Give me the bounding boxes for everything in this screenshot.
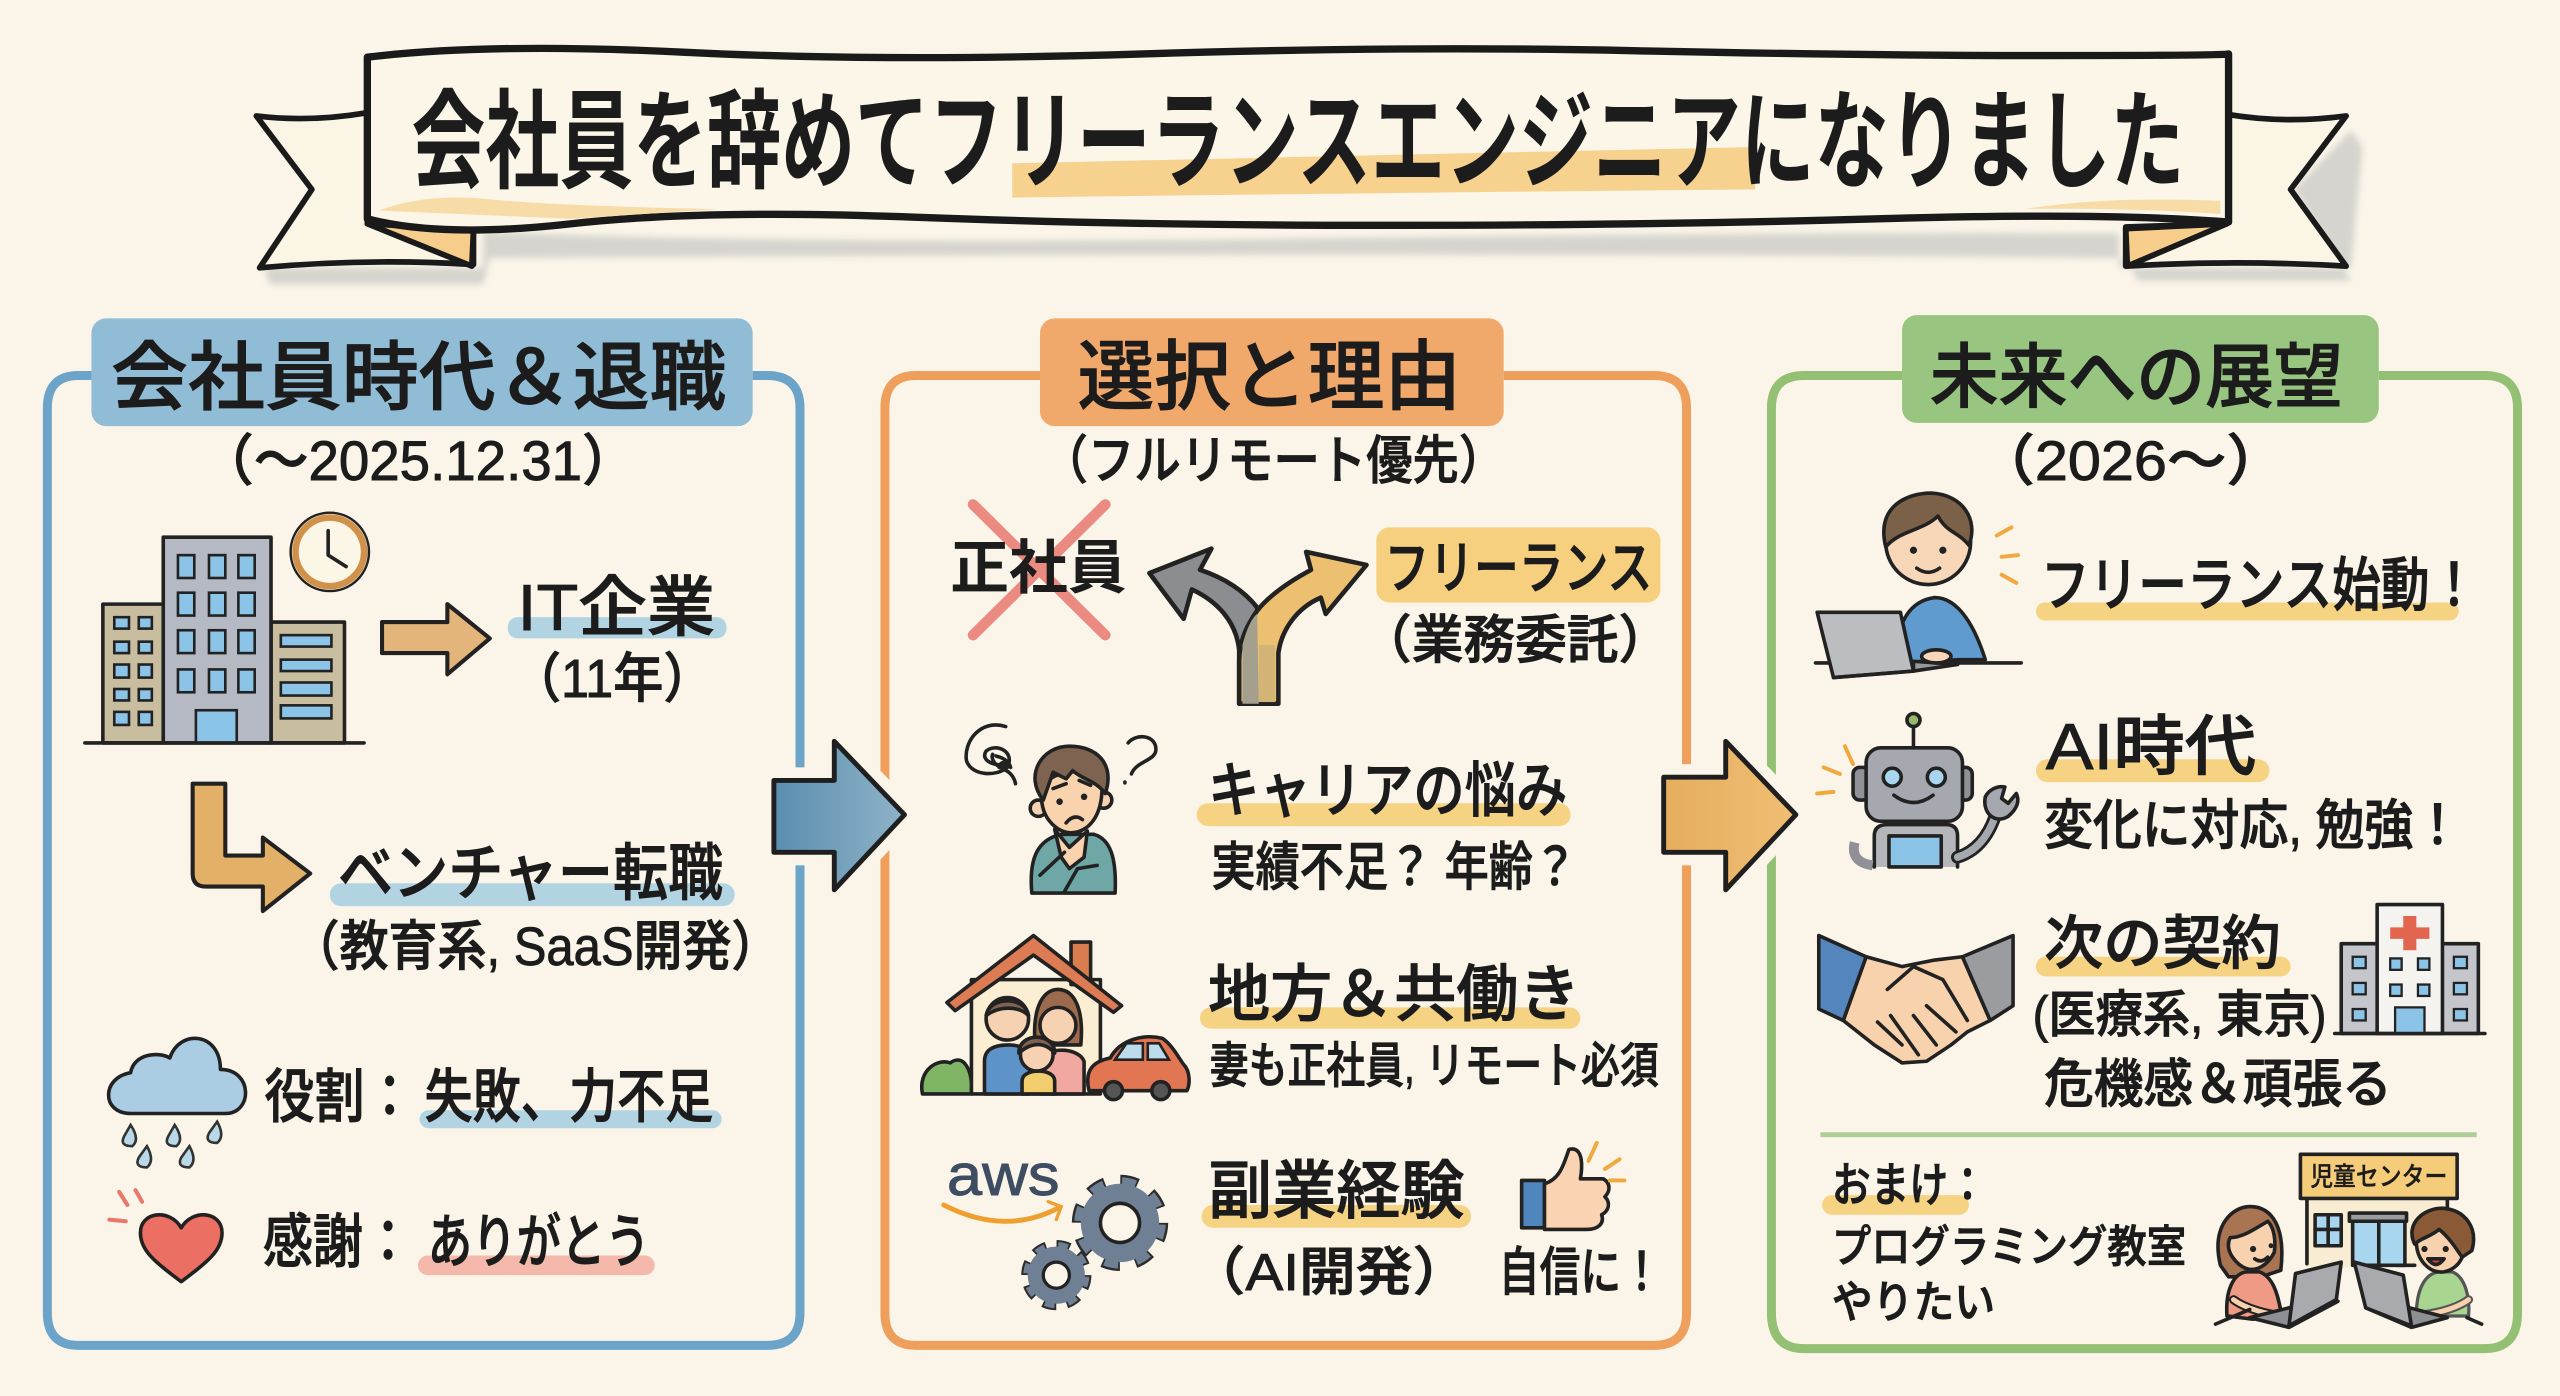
side job text [1189,1156,1471,1302]
girl [2218,1207,2282,1277]
IT company label [508,571,727,709]
icon: robot [1817,714,2018,867]
next contract text [2033,911,2392,1114]
role text: 役割： [264,1065,415,1130]
panel: company era and resignation [47,318,800,1345]
heading: 選択と理由 [1078,335,1461,420]
heading [1902,315,2379,423]
rural dual income text: 妻も正社員, リモート必須 [1210,1039,1659,1093]
icon: hospital [2335,905,2485,1034]
confidence text: 自信に！ [1499,1244,1662,1302]
career worries text: キャリアの悩み [1208,756,1567,824]
side job text: （AI開発） [1189,1244,1469,1302]
title ribbon [256,48,2362,284]
icon: rain cloud [109,1038,246,1167]
heading [1040,318,1504,426]
thanks text: 感謝： [263,1210,413,1275]
icon: family home and car [922,936,1189,1100]
heading: 会社員時代＆退職 [111,335,727,419]
bonus text [1822,1160,2186,1328]
L-shaped arrow to venture job [193,784,310,911]
remote-first subtitle: （フルリモート優先） [1042,432,1505,490]
year subtitle: （2026〜） [1976,430,2286,492]
icon: forked arrows [1149,549,1367,704]
career worries text: 実績不足？ 年齢？ [1211,839,1577,897]
boy [2416,1272,2469,1316]
freelance label [1360,527,1670,670]
icon: heart with rays [109,1190,222,1282]
bonus text: プログラミング教室 [1832,1223,2186,1272]
career worries text [1197,756,1577,897]
icon: kids programming at children's center [2216,1154,2482,1327]
heading: 未来への展望 [1930,338,2343,417]
icon: office building with clock [85,513,369,743]
bonus text: おまけ： [1832,1160,1987,1213]
freelance label: （業務委託） [1360,612,1670,670]
rural dual income text [1200,961,1659,1093]
AI era text: AI時代 [2046,710,2256,783]
left ribbon tail [256,113,473,268]
next contract text: (医療系, 東京) [2033,986,2327,1043]
AI era text: 変化に対応, 勉強！ [2044,796,2462,856]
role text [264,1065,722,1130]
question mark and squiggle [966,725,1156,784]
venture job label: ベンチャー転職 [338,840,723,909]
panel: choice and reasons [885,318,1687,1345]
divider [1820,1133,2477,1136]
right ribbon tail [2126,114,2346,266]
icon: aws logo: aws [947,1143,1060,1208]
icon: kids programming at children's center: 児童センター [2310,1161,2447,1191]
crossed-out regular employee [950,505,1127,635]
venture job label [291,840,780,977]
arrow to IT company [382,604,490,674]
icon: worried person [966,725,1156,893]
ribbon main band [367,48,2229,230]
next contract text: 次の契約 [2044,911,2281,976]
arrow: orange between panels [1664,741,1796,890]
side job text: 副業経験 [1208,1156,1464,1227]
crossed-out regular employee: 正社員 [950,536,1127,601]
laptops [2250,1301,2338,1327]
bonus text: やりたい [1832,1279,1995,1328]
IT company label: （11年） [511,649,713,709]
freelance start text: フリーランス始動！ [2041,554,2478,619]
arrow: blue between panels [774,741,904,890]
thanks text [263,1210,655,1275]
icon: gears [1029,1184,1159,1303]
IT company label: IT企業 [518,571,715,644]
thanks text: ありがとう [428,1210,650,1275]
rural dual income text: 地方＆共働き [1208,961,1580,1030]
icon: thumbs up [1522,1143,1624,1229]
panel: future outlook [1771,315,2518,1349]
icon: person at laptop [1816,493,2021,678]
AI era text [2036,710,2462,856]
freelance label: フリーランス [1384,537,1652,601]
icon: handshake [1819,936,2013,1063]
period subtitle: （〜2025.12.31） [199,430,637,492]
role text: 失敗、力不足 [424,1065,713,1130]
venture job label: （教育系, SaaS開発） [291,917,780,977]
next contract text: 危機感＆頑張る [2044,1056,2392,1114]
